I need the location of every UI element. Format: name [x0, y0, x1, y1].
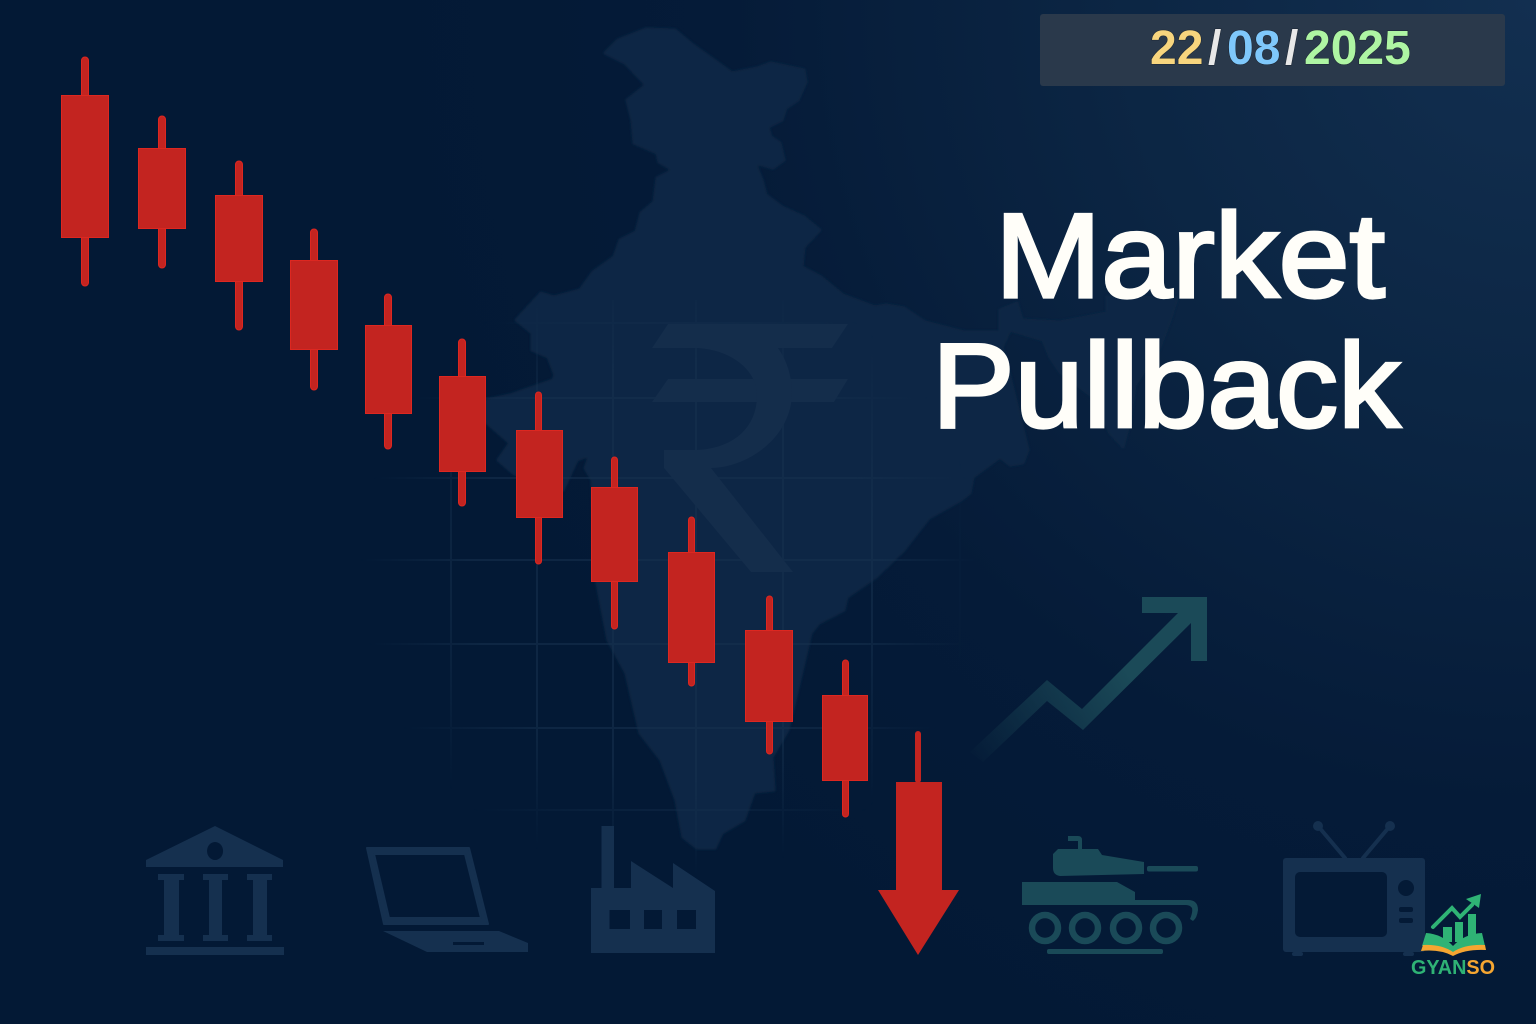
candle 1	[62, 57, 108, 286]
grid lines	[426, 366, 906, 811]
logo chart	[1422, 894, 1485, 953]
date text: 2025	[1304, 22, 1411, 75]
map of India watermark	[478, 29, 1177, 848]
candle 3	[216, 161, 262, 330]
title: Pullback	[932, 319, 1401, 453]
candlestick chart	[62, 57, 868, 817]
rupee symbol	[652, 324, 848, 572]
date text: /	[1208, 22, 1221, 75]
candle 7	[516, 392, 562, 564]
candle 8	[592, 457, 638, 629]
icon: factory	[591, 826, 715, 953]
GYANSO logo	[1411, 894, 1495, 979]
icon: bank	[146, 826, 284, 955]
date panel	[1040, 14, 1505, 86]
icon: laptop	[367, 848, 528, 952]
title: Market	[995, 189, 1385, 323]
date text: 08	[1227, 22, 1280, 75]
candle 2	[138, 116, 186, 268]
logo book base	[1421, 945, 1486, 956]
candle 5	[366, 294, 412, 449]
date text: /	[1285, 22, 1298, 75]
candle 9	[668, 517, 714, 686]
date text: 22	[1150, 22, 1203, 75]
red down arrow	[878, 731, 959, 955]
candle 4	[290, 229, 338, 390]
candle 6	[440, 339, 486, 506]
title	[932, 189, 1401, 453]
logo wordmark: GYANSO	[1411, 957, 1495, 979]
candle 11	[822, 660, 868, 817]
candle 10	[746, 596, 792, 754]
rising trend arrow	[970, 597, 1207, 762]
icon: tank	[1022, 836, 1198, 954]
icon: television	[1283, 821, 1425, 956]
